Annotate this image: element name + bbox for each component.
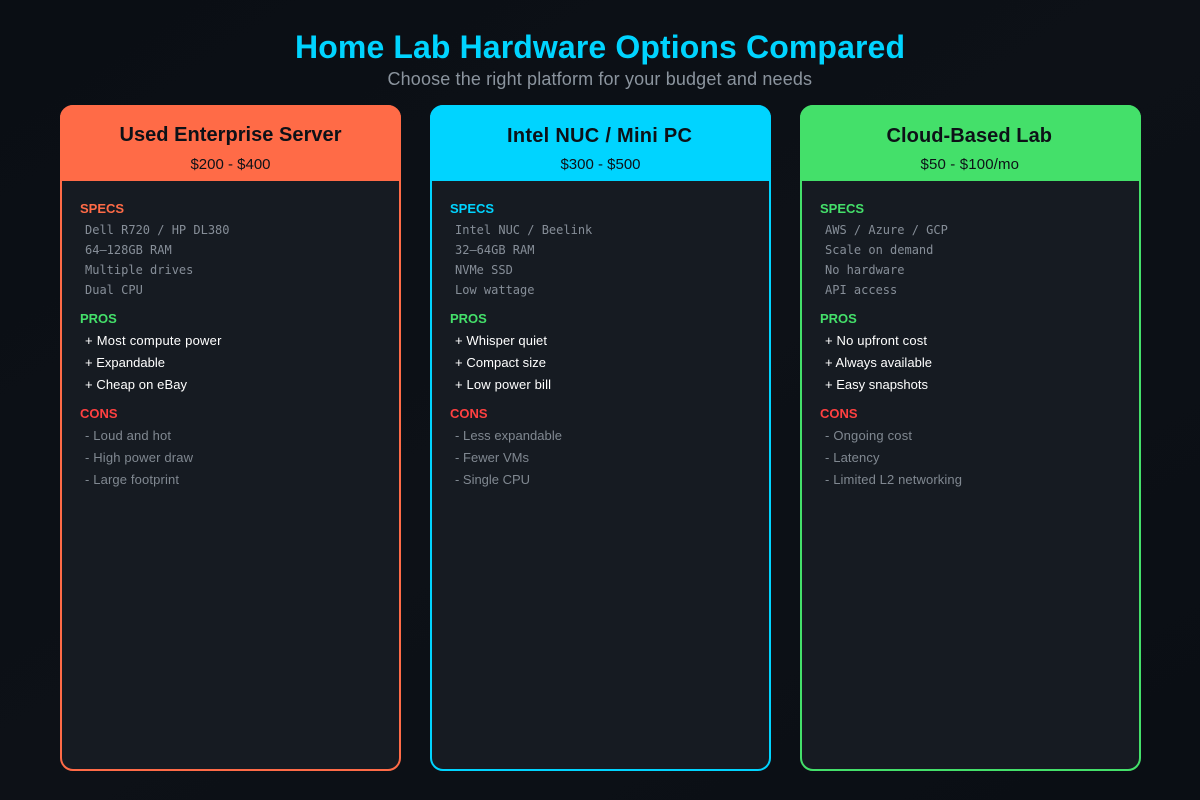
specs [80,201,230,297]
card title: Used Enterprise Server [120,124,342,146]
specs: Intel NUC / Beelink [455,223,593,237]
specs [820,201,948,297]
cons: - Large footprint [85,472,179,487]
pros: + Easy snapshots [825,377,928,392]
cons [820,406,962,487]
cons [450,406,562,487]
cons: - Loud and hot [85,428,171,443]
pros [80,311,222,392]
pros: + Most compute power [85,333,222,348]
specs: Dual CPU [85,283,143,297]
specs: NVMe SSD [455,263,513,277]
pros: + Always available [825,355,932,370]
pros: + Low power bill [455,377,551,392]
specs: SPECS [450,201,494,216]
specs: API access [825,283,897,297]
pros: + Expandable [85,355,165,370]
title: Home Lab Hardware Options Compared [295,29,905,65]
cons: CONS [450,406,488,421]
pros: PROS [820,311,857,326]
cons: - Limited L2 networking [825,472,962,487]
pros: PROS [450,311,487,326]
specs: AWS / Azure / GCP [825,223,948,237]
subtitle: Choose the right platform for your budget and needs [388,69,812,89]
header: used enterprise server [60,105,401,181]
panel: intel nuc [431,106,770,770]
specs [450,201,593,297]
specs: SPECS [820,201,864,216]
card title: Cloud-Based Lab [886,125,1052,147]
price: $200 - $400 [190,156,271,173]
pros: PROS [80,311,117,326]
price: $50 - $100/mo [920,156,1019,173]
cons: - Less expandable [455,428,562,443]
specs: Dell R720 / HP DL380 [85,223,230,237]
specs: 64–128GB RAM [85,243,172,257]
cons: - Single CPU [455,472,530,487]
cons: CONS [820,406,858,421]
card title: Intel NUC / Mini PC [507,125,692,147]
cons: - Latency [825,450,880,465]
specs: SPECS [80,201,124,216]
pros: + No upfront cost [825,333,927,348]
pros [820,311,932,392]
header: cloud-based lab [800,105,1141,181]
specs: Multiple drives [85,263,193,277]
cons [80,406,194,487]
cons: - Fewer VMs [455,450,530,465]
panel: cloud-based lab [801,106,1140,770]
pros [450,311,551,392]
price: $300 - $500 [560,156,641,173]
specs: No hardware [825,263,904,277]
pros: + Cheap on eBay [85,377,188,392]
pros: + Whisper quiet [455,333,547,348]
cons: CONS [80,406,118,421]
specs: 32–64GB RAM [455,243,534,257]
specs: Scale on demand [825,243,933,257]
specs: Low wattage [455,283,534,297]
pros: + Compact size [455,355,546,370]
header: intel nuc [430,105,771,181]
cons: - Ongoing cost [825,428,912,443]
cons: - High power draw [85,450,194,465]
panel: used enterprise server [61,106,400,770]
